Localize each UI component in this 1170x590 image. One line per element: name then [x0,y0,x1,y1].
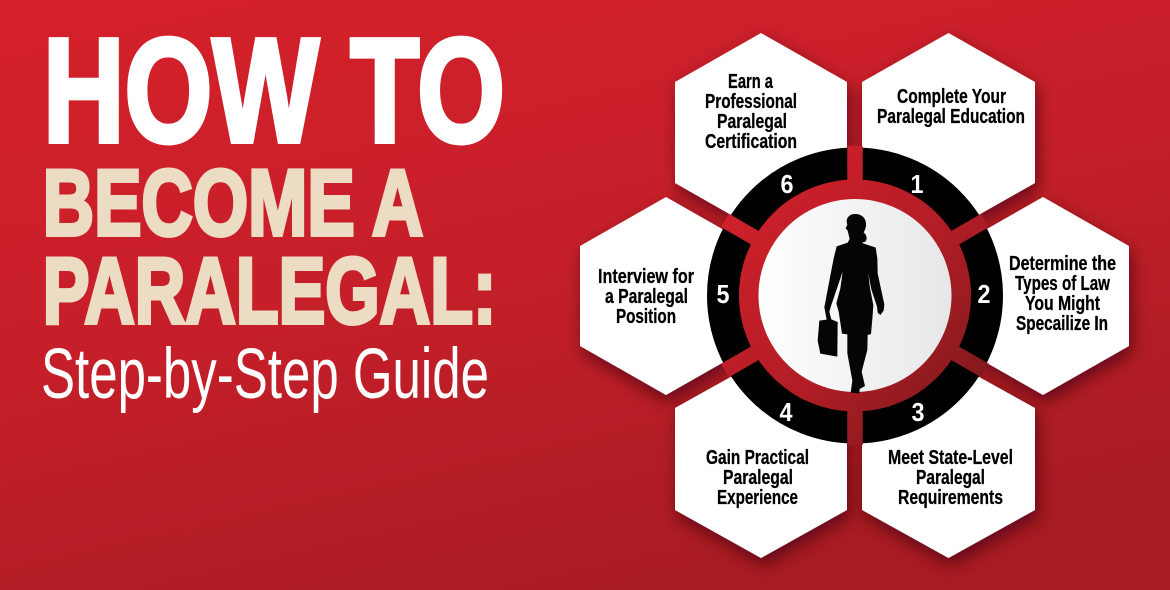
step 1 label [877,86,1025,128]
step 3 number: 3 [912,397,924,427]
step 5 label [598,266,694,328]
step 5 number: 5 [716,279,730,309]
step 2 label: Determine the [1009,253,1116,275]
step 5 label: Position [616,306,676,328]
step 4 label: Paralegal [723,467,793,489]
step 1 [877,86,1025,199]
step 3 label: Paralegal [916,467,985,489]
step 6 label: Earn a [728,71,774,93]
step 2 label: You Might [1025,293,1100,315]
step 6 label: Certification [705,131,797,153]
step 6 number: 6 [780,169,794,199]
step 4 label [706,447,809,509]
icon: businesswoman silhouette with briefcase [818,214,884,393]
step 5 label: Interview for [598,266,694,288]
step 2 [978,253,1116,335]
subtitle: Step-by-Step Guide [41,335,489,414]
step 1 label: Complete Your [897,86,1006,108]
step 4 label: Experience [717,487,798,509]
step 3 label: Meet State-Level [888,447,1013,469]
title line: BECOME A: BECOME A [43,150,423,255]
red spokes and inner ring [725,146,985,445]
step 1 number: 1 [910,169,924,199]
step 6 [705,71,797,199]
step 2 label: Specailize In [1016,313,1108,335]
step 3 label: Requirements [898,487,1003,509]
step 2 number: 2 [978,279,990,309]
hexagon diagram [580,33,1129,558]
title line: HOW TO: HOW TO [43,8,505,174]
step 4 number: 4 [780,397,793,427]
step 2 label: Types of Law [1015,273,1110,295]
step 6 label [705,71,797,153]
step 5 label: a Paralegal [605,286,688,308]
step 6 label: Professional [705,91,797,113]
step 3 [888,397,1013,509]
step 5 [598,266,730,328]
step 2 label [1009,253,1116,335]
step 3 label [888,447,1013,509]
step 4 [706,397,809,509]
step 6 label: Paralegal [717,111,787,133]
white centre disc [758,199,952,392]
title block [41,8,505,414]
step 1 label: Paralegal Education [877,106,1025,128]
title line: PARALEGAL: PARALEGAL: [43,238,496,343]
step 4 label: Gain Practical [706,447,809,469]
black numbered ring [724,164,986,427]
hexagon shapes [580,33,1129,558]
